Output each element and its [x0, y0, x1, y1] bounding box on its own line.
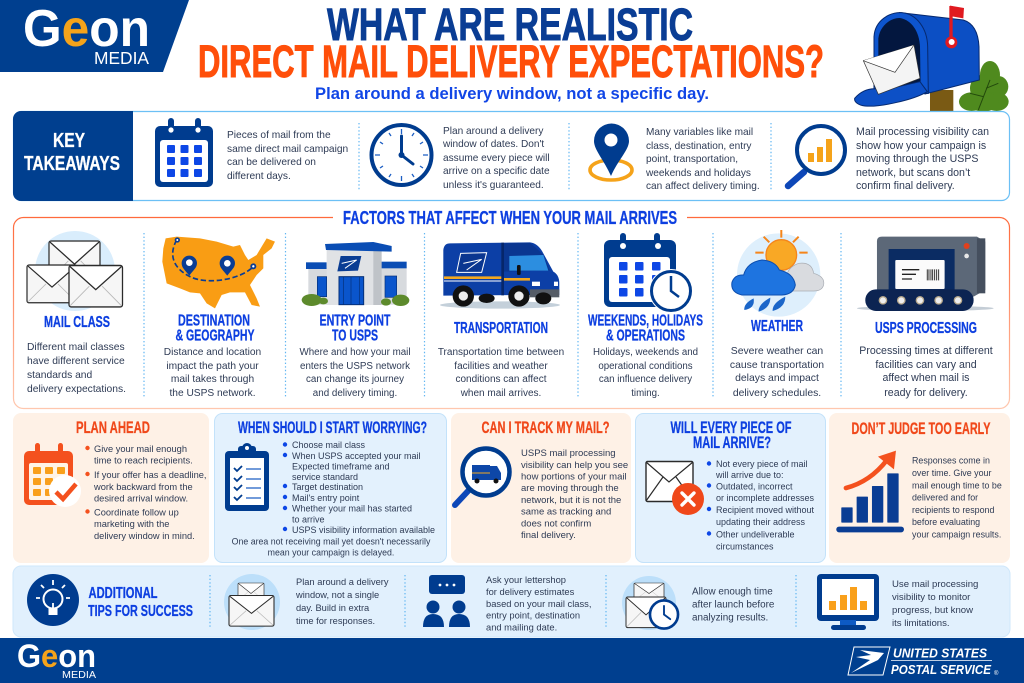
list: plan ahead: If your offer has a deadline, — [94, 470, 206, 480]
heading: destination: & GEOGRAPHY — [176, 328, 255, 344]
text: track: visibility can help you see — [521, 460, 628, 471]
key takeaways heading: TAKEAWAYS — [24, 153, 120, 175]
tip: lettershop: Ask your lettershop — [486, 575, 566, 585]
list: worrying: When USPS accepted your mail — [292, 451, 421, 461]
text: takeaway 1: same direct mail campaign — [227, 144, 348, 155]
USPS logo — [848, 646, 999, 677]
list: worrying — [283, 440, 435, 535]
text: usps processing: facilities can vary and — [875, 359, 977, 371]
icon: orange calendar with check — [24, 443, 81, 507]
heading: weather: WEATHER — [751, 318, 803, 335]
factor: destination — [162, 237, 275, 399]
icon: mail truck — [440, 242, 560, 309]
list: plan ahead: marketing with the — [94, 519, 169, 529]
heading: mail class: MAIL CLASS — [44, 314, 110, 331]
list: plan ahead — [85, 444, 206, 541]
panel: when should I start worrying — [214, 414, 446, 562]
tip: allow time: analyzing results. — [692, 612, 768, 624]
footer — [0, 638, 1024, 683]
tip: allow time: Allow enough time — [692, 586, 773, 598]
text: entry point: enters the USPS network — [300, 361, 410, 372]
text: weather: Severe weather can — [731, 346, 823, 357]
list: plan ahead: time to reach recipients. — [94, 456, 193, 466]
heading: weekends: WEEKENDS, HOLIDAYS — [588, 312, 703, 330]
icon: clipboard — [225, 443, 269, 511]
text: mail class: Different mail classes — [27, 342, 125, 353]
heading: entry point: ENTRY POINT — [320, 312, 391, 330]
title — [198, 0, 824, 87]
list: every piece: circumstances — [716, 542, 774, 552]
icon: envelopes — [27, 231, 122, 311]
tip: allow time: after launch before — [692, 600, 775, 610]
text: takeaway 2: arrive on a specific date — [443, 166, 550, 177]
text: takeaway 1: can be delivered on — [227, 157, 316, 168]
factor: usps processing — [857, 237, 994, 399]
icon: clock — [372, 125, 432, 185]
text: weather: cause transportation — [730, 360, 824, 371]
icon: envelope with x — [646, 462, 704, 515]
text: transportation: when mail arrives. — [460, 388, 541, 399]
text: mail class: delivery expectations. — [27, 384, 126, 395]
text: judge: before evaluating — [912, 517, 980, 527]
text: entry point — [299, 347, 411, 399]
factor: entry point — [299, 242, 411, 399]
text: mail class: standards and — [27, 370, 93, 381]
list: every piece: Outdated, incorrect — [716, 482, 793, 492]
text: takeaway 1 — [227, 130, 348, 182]
text: weekends: can influence delivery — [599, 374, 692, 385]
factor: mail class — [27, 231, 126, 395]
list: plan ahead: work backward from the — [93, 482, 193, 492]
text: judge — [912, 456, 1002, 540]
text: judge: over time. Give your — [912, 468, 991, 478]
tip: lettershop: based on your mail class, — [486, 599, 591, 609]
heading: entry point — [320, 312, 391, 344]
tip: allow time — [622, 576, 775, 630]
text: judge: Responses come in — [912, 456, 990, 466]
list: worrying: service standard — [292, 472, 358, 482]
text: entry point: can change its journey — [306, 374, 404, 385]
heading: destination — [176, 312, 255, 344]
key takeaways heading — [24, 130, 120, 175]
text: weather: delivery schedules. — [733, 388, 821, 399]
heading: track: CAN I TRACK MY MAIL? — [482, 418, 610, 437]
text: takeaway 2 — [442, 126, 550, 191]
tip: monitor: its limitations. — [892, 618, 950, 629]
tip: delivery window: Plan around a delivery — [296, 577, 389, 587]
logo banner — [0, 0, 189, 72]
text: takeaway 2: window of dates. Don't — [442, 139, 544, 150]
heading: entry point: TO USPS — [332, 328, 378, 344]
list: every piece: Not every piece of mail — [716, 459, 808, 469]
icon: US map with route — [162, 237, 275, 308]
panel: factors — [14, 208, 1010, 408]
tip: lettershop: and mailing date. — [486, 622, 557, 632]
text: track: same as tracking and — [521, 506, 611, 518]
text: weekends: Holidays, weekends and — [593, 347, 698, 358]
icon: growth chart — [836, 451, 904, 532]
text: takeaway 3: class, destination, entry — [646, 141, 752, 152]
text: mail class: have different service — [27, 356, 125, 367]
list: worrying: Target destination — [292, 482, 363, 492]
text: transportation: facilities and weather — [454, 361, 548, 372]
heading: every piece: WILL EVERY PIECE OF — [670, 418, 792, 437]
text: usps processing: affect when mail is — [883, 372, 969, 384]
heading: additional tips — [88, 585, 193, 620]
tip: delivery window: day. Build in extra — [296, 603, 370, 613]
text: takeaway 4: confirm final delivery. — [856, 180, 955, 192]
factor: transportation — [438, 242, 564, 399]
footer logo: Geon — [17, 638, 96, 674]
heading: additional tips: ADDITIONAL — [88, 585, 158, 602]
list: worrying: USPS visibility information available — [292, 525, 435, 535]
list: worrying: Choose mail class — [292, 440, 366, 450]
text: usps processing — [859, 345, 993, 399]
tip: monitor: progress, but know — [892, 605, 973, 616]
text: mail class — [27, 342, 126, 395]
panel: additional tips — [13, 566, 1010, 637]
text: judge: delivered and for — [912, 492, 978, 502]
heading: transportation: TRANSPORTATION — [454, 320, 548, 337]
text: usps processing: Processing times at different — [859, 345, 993, 357]
heading: weekends — [588, 312, 703, 344]
text: worrying note: One area not receiving mail yet doesn't necessarily — [232, 536, 431, 546]
text: worrying note — [232, 536, 431, 558]
text: weather: delays and impact — [735, 373, 819, 384]
text: track: does not confirm — [521, 518, 591, 530]
footer logo: MEDIA — [62, 669, 96, 681]
text: judge: your campaign results. — [912, 530, 1001, 540]
heading: weekends: & OPERATIONS — [606, 328, 685, 344]
text: destination: mail takes through — [171, 374, 254, 385]
text: takeaway 3 — [645, 127, 760, 192]
text: takeaway 4 — [856, 126, 989, 192]
text: transportation: Transportation time between — [438, 347, 564, 358]
tip: monitor — [817, 574, 978, 630]
list: every piece: or incomplete addresses — [716, 493, 815, 503]
icon: calendar — [155, 118, 213, 187]
text: weather — [730, 346, 824, 399]
text: takeaway 4: network, but scans don’t — [856, 167, 970, 179]
icon: sun cloud rain — [732, 230, 824, 317]
logo wordmark: Geon — [23, 0, 150, 58]
list: plan ahead: Give your mail enough — [94, 444, 187, 454]
panel: don't judge too early — [829, 413, 1010, 563]
text: destination: Distance and location — [164, 347, 261, 358]
heading: plan ahead: PLAN AHEAD — [76, 418, 150, 437]
list: every piece — [707, 459, 815, 552]
text: destination: impact the path your — [166, 361, 259, 372]
text: takeaway 3: can affect delivery timing. — [646, 181, 760, 192]
heading: every piece — [670, 418, 792, 452]
factors heading: FACTORS THAT AFFECT WHEN YOUR MAIL ARRIVES — [343, 208, 677, 228]
heading: worrying: WHEN SHOULD I START WORRYING? — [238, 418, 427, 437]
list: worrying: Whether your mail has started — [292, 504, 412, 514]
panel: plan ahead — [13, 413, 209, 563]
icon: post office — [302, 242, 409, 306]
tip: lettershop — [423, 575, 591, 632]
text: takeaway 2: assume every piece will — [443, 153, 550, 164]
text: takeaway 1: different days. — [227, 171, 291, 182]
heading: additional tips: TIPS FOR SUCCESS — [88, 603, 193, 620]
text: takeaway 3: Many variables like mail — [646, 127, 753, 138]
icon: processing machine — [857, 237, 994, 311]
text: weekends — [593, 347, 698, 399]
text: takeaway 2: Plan around a delivery — [443, 126, 544, 137]
tip: delivery window — [224, 574, 389, 630]
tip: monitor: Use mail processing — [892, 579, 978, 590]
factor: weather — [730, 230, 824, 399]
tip: monitor: visibility to monitor — [892, 592, 971, 603]
factor: weekends — [588, 233, 703, 399]
icon: magnifier with truck — [455, 448, 510, 505]
tip: lettershop: for delivery estimates — [486, 587, 575, 597]
list: worrying: Mail's entry point — [292, 493, 360, 503]
icon: mailbox — [855, 6, 1009, 112]
text: weekends: operational conditions — [598, 361, 693, 372]
text: transportation — [438, 347, 564, 399]
text: takeaway 4: Mail processing visibility can — [856, 126, 989, 138]
subtitle: Plan around a delivery window, not a specific day. — [315, 85, 709, 103]
logo sub-label: MEDIA — [94, 48, 149, 68]
key takeaways heading: KEY — [53, 130, 86, 152]
title: WHAT ARE REALISTIC — [327, 0, 693, 50]
panel: will every piece arrive — [636, 414, 826, 562]
text: entry point: Where and how your mail — [299, 347, 411, 358]
list: every piece: Other undeliverable — [716, 530, 795, 540]
text: usps processing: ready for delivery. — [884, 387, 968, 399]
text: track: network, but it is not the — [521, 495, 621, 506]
panel: key takeaways — [13, 111, 1010, 201]
text: takeaway 4: moving through the USPS — [856, 153, 978, 165]
text: weekends: timing. — [631, 388, 660, 399]
list: worrying: Expected timeframe and — [292, 462, 390, 472]
list: plan ahead: delivery window in mind. — [94, 531, 195, 541]
text: track: how portions of your mail — [521, 472, 627, 482]
icon: magnifier with bars — [788, 126, 845, 186]
panel: can I track my mail — [451, 413, 631, 563]
list: every piece: updating their address — [716, 517, 806, 527]
text: track: USPS mail processing — [521, 448, 616, 459]
text: destination: the USPS network. — [169, 388, 256, 399]
USPS logo: POSTAL SERVICE — [891, 663, 992, 677]
text: takeaway 4: show how your campaign is — [856, 140, 986, 152]
USPS logo: ® — [994, 670, 999, 677]
tip: delivery window: time for responses. — [296, 616, 375, 626]
heading: destination: DESTINATION — [178, 312, 250, 330]
list: every piece: will arrive due to: — [715, 470, 784, 480]
text: takeaway 3: point, transportation, — [646, 154, 738, 165]
text: track — [521, 448, 628, 541]
list: worrying: to arrive — [292, 514, 325, 524]
text: destination — [164, 347, 261, 399]
list: plan ahead: Coordinate follow up — [94, 508, 179, 518]
text: takeaway 3: weekends and holidays — [645, 168, 751, 179]
key takeaways label block — [13, 111, 133, 201]
text: judge: recipients to respond — [912, 505, 994, 515]
icon: location pin — [590, 124, 632, 180]
tip: lettershop: entry point, destination — [486, 610, 580, 620]
text: transportation: conditions can affect — [456, 374, 547, 385]
heading: every piece: MAIL ARRIVE? — [693, 433, 771, 452]
text: takeaway 2: unless it's guaranteed. — [443, 180, 544, 191]
list: plan ahead: desired arrival window. — [94, 494, 188, 504]
icon: lightbulb — [27, 574, 79, 626]
text: entry point: and delivery timing. — [313, 388, 397, 399]
icon: calendar and clock — [604, 233, 693, 313]
text: judge: mail enough time to be — [912, 480, 1002, 490]
text: track: are moving through the — [521, 483, 619, 494]
text: takeaway 1: Pieces of mail from the — [227, 130, 331, 141]
USPS logo: UNITED STATES — [893, 646, 988, 660]
list: every piece: Recipient moved without — [716, 505, 815, 515]
text: track: final delivery. — [521, 530, 576, 541]
tip: delivery window: window, not a single — [295, 590, 379, 600]
text: worrying note: mean your campaign is delayed. — [268, 548, 394, 558]
